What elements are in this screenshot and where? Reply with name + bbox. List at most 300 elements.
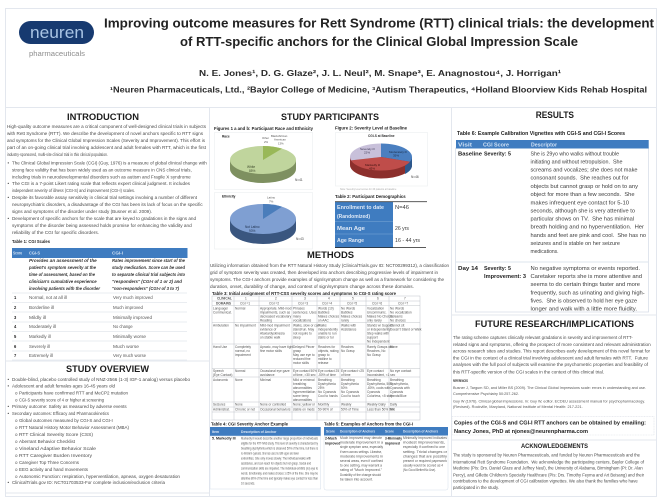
text block: study overview list: •	[8, 377, 10, 382]
table 5: examples of anchors from the CGI-I: moderate improvement in a	[340, 440, 383, 444]
table 3: initial assignment of RTT-CSS scores: Babbles	[318, 310, 330, 314]
table 3: initial assignment of RTT-CSS scores: No Words	[341, 306, 356, 310]
table 3: initial assignment of RTT-CSS scores: rarely	[341, 318, 349, 322]
table 3: initial assignment of RTT-CSS scores: Reaches	[341, 345, 354, 349]
references: Comprehensive Psychiatry 50:257-262.	[453, 392, 519, 396]
logo: neuren pharmaceuticals: neuren	[30, 23, 84, 42]
table 3: initial assignment of RTT-CSS scores: Language/	[213, 306, 228, 310]
table 3: initial assignment of RTT-CSS scores: Vocalization	[367, 306, 384, 310]
table 3: initial assignment of RTT-CSS scores: sleep	[293, 336, 301, 340]
table 3: initial assignment of RTT-CSS scores: No Words	[390, 306, 405, 310]
chart: race pie: N=41	[295, 178, 303, 182]
table 1: CGI scales: to separate clinical trial subjects into	[112, 272, 185, 277]
text block: study overview list: Secondary outcomes: Efficacy and Pharmacokinetics	[12, 411, 110, 416]
references: Busner J, Targum SD, and Miller BS (2009). The Clinical Global Impressions scale: errors in understanding and use.	[453, 386, 646, 390]
table 3: initial assignment of RTT-CSS scores: Weekly-Daily	[367, 402, 386, 406]
table 3: initial assignment of RTT-CSS scores: Delayed Pincer	[293, 345, 316, 349]
table 1: CGI scales: Mildly ill	[29, 315, 46, 320]
text block: acknowledgements: participated in the study.	[453, 485, 499, 490]
text block: introduction paragraph: industry-sponsored, multi-site clinical trial in this clinical population.	[7, 152, 108, 157]
heading: acknowledgements: ACKNOWLEDGEMENTS	[521, 444, 588, 450]
figure 2: severity level at baseline pie	[335, 126, 428, 191]
table 5: examples of anchors from the CGI-I: changes that are possibly	[403, 454, 447, 458]
references: (Revised). Rockville, Maryland, National Institute of Mental Health: 217-221.	[453, 405, 583, 409]
table 3: initial assignment of RTT-CSS scores: Chronic or not	[235, 408, 255, 412]
table 3: initial assignment of RTT-CSS scores: -80%, cools with	[367, 386, 390, 390]
table 3: initial assignment of RTT-CSS scores: No vocalization	[390, 310, 412, 314]
table 1: CGI scales: Very much worse	[113, 353, 147, 358]
table 3: initial assignment of RTT-CSS scores: not require to	[293, 332, 312, 336]
table 3: initial assignment of RTT-CSS scores: Breathing	[367, 378, 381, 382]
vignette: baseline descriptor: objects but cannot grasp or hold on to any	[530, 184, 638, 190]
table 3: initial assignment of RTT-CSS scores: Communicat.	[213, 310, 232, 314]
figure 2: severity level at baseline pie: 43%	[369, 166, 375, 170]
table 3: initial assignment of RTT-CSS scores: Autonomic	[213, 378, 228, 382]
table 3: initial assignment of RTT-CSS scores: CGI =2	[269, 301, 279, 305]
text block: introduction bullets: •	[8, 160, 10, 166]
table 6: example calibration vignettes: Descriptor	[531, 142, 558, 148]
text block: introduction paragraph: part of an on-going clinical trial involving adolescent and adult females with RTT, which is the first	[7, 145, 207, 150]
table 3: initial assignment of RTT-CSS scores: Assistance	[341, 328, 357, 332]
table 4: CGI severity anchor example: attentive 80% of the time and typically makes eye contact for less than	[241, 476, 318, 480]
table 3: initial assignment of RTT-CSS scores: Eye contact <25	[341, 369, 364, 373]
title	[104, 16, 655, 49]
table 3: initial assignment of RTT-CSS scores: Dysrhythmia	[318, 382, 336, 386]
text block: introduction bullets: The CGI is a 7-point Likert rating scale that reflects expert clinical judgment. It includes	[12, 181, 191, 186]
table 1: CGI scales: 5	[14, 334, 17, 339]
text block: introduction bullets	[8, 160, 207, 235]
vignette: day 14 descriptor: fives. She is observed to hold her eye gaze	[530, 299, 638, 305]
table 4: CGI severity anchor example: 5. Markedly Ill	[212, 436, 236, 440]
figure 2: severity level at baseline pie: Moderately ill	[389, 150, 407, 154]
text block: study overview list: Aberrant Behavior Checklist	[19, 439, 76, 444]
table 5: examples of anchors from the CGI-I: usually would be scored as 4	[403, 464, 443, 468]
chart: race pie: Other	[262, 136, 269, 140]
table 3: initial assignment of RTT-CSS scores: Walks with	[341, 324, 356, 328]
vignette: day 14 descriptor: frequently, such as urinating and giving high-	[530, 290, 645, 296]
table 3: initial assignment of RTT-CSS scores: Phrases	[293, 306, 305, 310]
table 5: examples of anchors from the CGI-I: modest improvements,	[403, 440, 445, 444]
table 3: initial assignment of RTT-CSS scores: 25%	[318, 386, 325, 390]
table 3: initial assignment of RTT-CSS scores: reduced fine	[293, 357, 311, 361]
table 3: initial assignment of RTT-CSS scores: No Cyanosis	[341, 390, 359, 394]
table 5: examples of anchors from the CGI-I: present or required paperwork	[403, 459, 447, 463]
text block: study overview list: Caregiver Top Three Concerns	[19, 460, 80, 465]
table 3: initial assignment of RTT-CSS scores: Words (10)	[318, 306, 334, 310]
table 3: initial assignment of RTT-CSS scores: Colorless, <5 stay	[367, 394, 393, 398]
table 3: initial assignment of RTT-CSS scores: sentences. Uses	[293, 310, 317, 314]
table 3: initial assignment of RTT-CSS scores: Daily	[390, 402, 397, 406]
table 3: initial assignment of RTT-CSS scores: Reaches, No	[367, 349, 386, 353]
figure 2: severity level at baseline pie: N=46	[411, 175, 419, 179]
table 3: initial assignment of RTT-CSS scores: None; yellow or	[293, 402, 316, 406]
chart: ethnicity pie: 7%	[269, 200, 274, 204]
text block: introduction bullets: neuropsychiatric disorders, a disadvantage of the CGI has been its lack of focus on the specific	[12, 202, 203, 207]
figure 1: participant race and ethnicity pies	[214, 126, 314, 249]
table 3: initial assignment of RTT-CSS scores: fine motor skills	[260, 349, 282, 353]
table 3: initial assignment of RTT-CSS scores: motor skills	[293, 361, 309, 365]
table 1: CGI scales: Moderately ill	[29, 324, 56, 329]
table 5: examples of anchors from the CGI-I: Description of Anchors	[340, 430, 375, 434]
table 5: examples of anchors from the CGI-I: Much improved may denote	[340, 436, 382, 440]
table 3: initial assignment of RTT-CSS scores: Mild or minimal	[293, 378, 315, 382]
vignette: baseline descriptor: breath holding and no hyperventilation. Her	[530, 225, 644, 231]
text block: introduction bullets: •	[8, 195, 10, 200]
table 2: participant demographics: 26 yrs	[395, 226, 409, 232]
chart: ethnicity pie: N=43	[296, 237, 304, 241]
table 3: initial assignment of RTT-CSS scores: No impairment	[235, 324, 256, 328]
table 3: initial assignment of RTT-CSS scores	[212, 291, 422, 420]
table 1: CGI scales: Minimally improved	[113, 315, 153, 320]
text block: study overview list: o	[15, 446, 18, 451]
chart: race pie: Race	[222, 134, 230, 138]
text block: implications: analyses with the full pool of subjects will examine the psychometric properties and feasibility of	[453, 362, 649, 367]
table 5: examples of anchors from the CGI-I: be taken into account.	[340, 478, 373, 482]
table 3: initial assignment of RTT-CSS scores: some temp	[293, 394, 309, 398]
figure 2: severity level at baseline pie: Markedly ill	[365, 163, 380, 167]
text block: introduction bullets: including trials in neurodevelopmental disorders such as autism and Fragile X syndrome	[12, 174, 191, 180]
chart: race pie: 2%	[264, 140, 269, 144]
table 3: initial assignment of RTT-CSS scores: avoidance	[260, 373, 275, 377]
table 3: initial assignment of RTT-CSS scores: objects, raking	[318, 349, 339, 353]
table 3: initial assignment of RTT-CSS scores: Apraxic, may have tight	[260, 345, 293, 349]
table 4: CGI severity anchor example: eligible for the RTT-NNS study. This level of severity is characterized by	[241, 442, 318, 446]
chart: race pie: White	[247, 165, 255, 169]
table 3: initial assignment of RTT-CSS scores: Weekly	[341, 402, 352, 406]
logo: neuren pharmaceuticals	[19, 21, 94, 58]
text block: introduction bullets: strong face validity that has been widely used as an outcome measure in CNS clinical trials,	[12, 168, 192, 172]
text block: study overview list: o	[15, 398, 18, 402]
table 3: initial assignment of RTT-CSS scores: 50-90% of	[318, 408, 333, 412]
table 3: initial assignment of RTT-CSS scores: -50% of time	[318, 373, 336, 377]
table 2: participant demographics	[335, 194, 427, 248]
table 3: initial assignment of RTT-CSS scores: stable on meds	[293, 408, 315, 412]
text block: introduction bullets: The Clinical Global Impression Scale (CGI) (Guy, 1976) is a measure of global clinical change with	[12, 160, 207, 166]
table 4: CGI severity anchor example: breathing dysrhythmia which is observed 50% of the time, but there is	[241, 446, 318, 450]
table 1: CGI scales: Extremely ill	[29, 353, 53, 358]
table 2: participant demographics: Enrollment to date	[337, 205, 384, 211]
text block: study overview list: RTT Clinical Severity Score (CSS)	[19, 432, 94, 437]
heading: results: RESULTS	[536, 110, 574, 120]
text block: methods paragraph: duration, onset, durability of change, and context of sign/symptom change across these domains.	[210, 284, 414, 289]
table 5: examples of anchors from the CGI-I: single symptom area, especially	[340, 445, 383, 449]
table 5: examples of anchors from the CGI-I: moderate improvements in	[340, 454, 383, 458]
table 2: participant demographics: N=46	[395, 205, 409, 211]
table 3: initial assignment of RTT-CSS scores: DOMAINS	[216, 301, 231, 305]
table 1 caption: Table 1: CGI Scales	[12, 239, 51, 244]
text block: methods paragraph	[210, 263, 449, 289]
table 3: initial assignment of RTT-CSS scores: No Cyanosis	[318, 390, 336, 394]
table 1: CGI scales: 7	[14, 353, 17, 358]
vignette: baseline descriptor: screams and vocalizes; she does not make	[530, 168, 638, 174]
table 1: CGI scales: time of assessment, based on the	[29, 272, 96, 277]
table 3: initial assignment of RTT-CSS scores: of time	[341, 373, 351, 377]
table 3: initial assignment of RTT-CSS scores: Cyanosis	[367, 390, 381, 394]
vignette: baseline descriptor: hands and feet are pink and cool. She has no	[530, 233, 647, 239]
table 3: initial assignment of RTT-CSS scores: 50% of Time	[341, 408, 359, 412]
table 3: initial assignment of RTT-CSS scores: No Grasp	[341, 349, 355, 353]
table 3: initial assignment of RTT-CSS scores: Occasional eye gaze	[260, 369, 290, 373]
text block: introduction bullets: •	[8, 181, 10, 186]
chart: ethnicity pie: Not Latino	[245, 225, 260, 229]
table 1: CGI scales: patient's symptom severity at the	[28, 265, 97, 270]
table 4: CGI severity anchor example: assistance, and can reach for objects but not grasp. Social and	[241, 462, 311, 466]
table 3: initial assignment of RTT-CSS scores: support	[367, 336, 378, 340]
table 3: initial assignment of RTT-CSS scores: CGI =3	[298, 301, 308, 305]
table 3: initial assignment of RTT-CSS scores: Completely	[235, 345, 251, 349]
figure 2: severity level at baseline pie: Note: Severity level scores for 46 patients at baseline	[340, 188, 397, 191]
table 3: initial assignment of RTT-CSS scores: midline to	[318, 357, 332, 361]
text block: study overview list: o	[15, 467, 18, 472]
table 4: CGI severity anchor example: no limb/arm cyanosis. She has used, but still upper and lower	[241, 452, 299, 456]
table 3: initial assignment of RTT-CSS scores: impairment	[235, 353, 251, 357]
table 3: initial assignment of RTT-CSS scores: CGI =4	[322, 301, 332, 305]
text block: implications	[453, 335, 651, 375]
table 5: examples of anchors from the CGI-I: Improved	[325, 442, 340, 446]
table 3: initial assignment of RTT-CSS scores: stairs or tur	[318, 336, 335, 340]
text block: study overview list: ClinicalTrials.gov ID: NCT01703533-For complete inclusion/exclusion criteria	[12, 480, 165, 485]
table 3: initial assignment of RTT-CSS scores: No eye contact	[390, 369, 411, 373]
chart: race pie: Black/African	[271, 134, 288, 138]
text block: methods paragraph: symptoms. The CGI-I anchors provide examples of sign/symptom change as well as a framework for considering the	[210, 277, 445, 282]
panel: introduction	[7, 112, 207, 235]
table 6: example calibration vignettes: Severity: 5	[484, 266, 511, 272]
table 6: example calibration vignettes: CGI Score	[483, 142, 510, 148]
text block: implications: related signs and symptoms, offering the prospect of more consistent and relevant administration	[453, 342, 651, 347]
table 1: CGI scales: Much improved	[113, 305, 144, 310]
table 3: initial assignment of RTT-CSS scores: Stands w/ Support	[367, 324, 393, 328]
table 3: initial assignment of RTT-CSS scores: of time, >30 sec	[293, 373, 316, 377]
figure 1 caption: Figures 1 a and b: Participant Race and Ethnicity	[214, 126, 314, 131]
text block: study overview list: Double-blind, placebo controlled study of NNZ-2566 (1-3) IGF-1 analog) versus placebo	[12, 377, 191, 382]
table 3: initial assignment of RTT-CSS scores: grasp	[293, 349, 301, 353]
table 3: initial assignment of RTT-CSS scores: 50%	[341, 386, 348, 390]
text block: study overview list: Adolescent and adult females ages 16-45 years old	[12, 384, 115, 388]
table 5: examples of anchors from the CGI-I: 2-Much	[325, 436, 337, 440]
table 4: CGI severity anchor example: words. Emotionally, and makes choices 1-25% of the time. She may be	[241, 472, 318, 476]
table 4: CGI severity anchor example	[210, 422, 321, 489]
table 3: initial assignment of RTT-CSS scores: Dysrhythmia, 50%	[367, 382, 393, 386]
table 3: initial assignment of RTT-CSS scores: grasp to	[318, 353, 330, 357]
text block: implications: this RTT-specific version of the CGI scales in the context of this clinical trial.	[453, 370, 604, 375]
figure 2 caption: Figure 2: Severity Level at Baseline	[335, 126, 408, 130]
table 3: initial assignment of RTT-CSS scores: No choices	[390, 318, 406, 322]
table 3: initial assignment of RTT-CSS scores: Dysrhythmia	[341, 382, 359, 386]
vignette: baseline descriptor: medications.	[530, 249, 559, 255]
chart: race pie: 85%	[249, 169, 256, 173]
text block: study overview list: CGI-S severity score of 4 or higher at screening	[19, 398, 104, 402]
table 3: initial assignment of RTT-CSS scores: hyperventilation	[293, 390, 316, 394]
table 2 caption: Table 2: Participant Demographics	[335, 194, 406, 199]
text block: implications: the CGI in the context of a clinical trial involving adolescent and adult females with RTT. Future	[453, 356, 649, 361]
table 1: CGI scales: study medication. Score can be used	[112, 265, 185, 270]
callout: copies of anchors	[452, 417, 654, 435]
table 1: CGI scales: CGI-I	[112, 250, 123, 256]
table 3: initial assignment of RTT-CSS scores: abnormalities	[293, 398, 312, 402]
vignette: baseline descriptor	[530, 151, 647, 255]
text block: study overview list: o	[15, 418, 18, 423]
table 6: example calibration vignettes: Baseline	[458, 151, 482, 157]
table 3: initial assignment of RTT-CSS scores: 3	[304, 297, 306, 301]
table 5: examples of anchors from the CGI-I: if seen across settings. Likewise,	[340, 450, 382, 454]
table 1: CGI scales: "non-responders" (CGI-I of 3 to 7)	[112, 286, 180, 291]
text block: introduction bullets: •	[8, 216, 10, 221]
table 3: initial assignment of RTT-CSS scores: 1	[245, 297, 247, 301]
heading: study participants: STUDY PARTICIPANTS	[281, 112, 379, 122]
table 4: CGI severity anchor example: 10 seconds.	[241, 482, 255, 486]
text block: study overview list: Vineland Adaptive Behavior Scale	[19, 446, 97, 451]
table 4: CGI severity anchor example: Description of Anchor	[241, 430, 277, 434]
table 3: initial assignment of RTT-CSS scores: CGI =1	[240, 301, 250, 305]
table 2: participant demographics: Mean Age	[337, 226, 365, 232]
logo: neuren pharmaceuticals: pharmaceuticals	[29, 51, 86, 58]
table 3: initial assignment of RTT-CSS scores: No Grasp	[367, 353, 381, 357]
table 5: examples of anchors from the CGI-I: to one setting, may warrant a	[340, 464, 382, 468]
table 3: initial assignment of RTT-CSS scores: Seizures	[213, 402, 226, 406]
text block: study overview list: o	[15, 460, 18, 465]
table 3: initial assignment of RTT-CSS scores: Makes choices	[318, 314, 339, 318]
callout: copies of anchors: Copies of the CGI-S and CGI-I RTT anchors can be obtained by emailing:	[454, 420, 646, 426]
table 1: CGI scales: Score	[13, 250, 23, 256]
table 3: initial assignment of RTT-CSS scores: NR	[390, 408, 395, 412]
table 1: CGI scales: involving patients with the disorder	[29, 286, 100, 291]
affiliations: ¹Neuren Pharmaceuticals, Ltd., ²Baylor College of Medicine, ³Autism Therapeutics, ⁴Holland Bloorview Kids Rehab Hospital	[110, 86, 647, 94]
table 3: initial assignment of RTT-CSS scores: Appropriate. Mild-mod	[260, 306, 292, 310]
table 3: initial assignment of RTT-CSS scores: decreased vocabulary	[260, 314, 292, 318]
text block: study overview list: Participants have confirmed RTT and MeCP2 mutation	[19, 390, 128, 396]
table 3: initial assignment of RTT-CSS scores: impairments, such as	[260, 310, 291, 314]
table 3: initial assignment of RTT-CSS scores: Step walks with	[367, 332, 389, 336]
vignette: baseline descriptor: initiating and without retropulsion. She	[530, 159, 623, 165]
text block: implications: The rating scheme captures clinically relevant gradations in severity and improvement of RTT-	[453, 335, 633, 340]
text block: introduction bullets: reliability of the CGI for specific disorders.	[12, 230, 99, 235]
table 3: initial assignment of RTT-CSS scores: Administrat.	[213, 408, 230, 412]
table 5: examples of anchors from the CGI-I: Durability of the change should	[340, 473, 381, 477]
table 3: initial assignment of RTT-CSS scores: Dysrhythmia,	[390, 382, 409, 386]
table 1: CGI scales: 4	[14, 324, 17, 329]
table 3: initial assignment of RTT-CSS scores: Eye contact 50%	[293, 369, 317, 373]
table 3: initial assignment of RTT-CSS scores: Makes choices	[341, 314, 362, 318]
callout: copies of anchors: Nancy Jones, PhD at njones@neurenpharma.com	[454, 429, 588, 435]
table 3: initial assignment of RTT-CSS scores: Minimal	[260, 378, 271, 382]
table 3: initial assignment of RTT-CSS scores: Breathing	[318, 378, 332, 382]
text block: study overview list: Primary outcome: Safety as measured by adverse events	[12, 404, 127, 409]
table 1: CGI scales: "responders" (CGI-I of 1 or 2) and	[112, 279, 182, 284]
table 1: CGI scales: Borderline ill	[29, 305, 54, 310]
table 3: initial assignment of RTT-CSS scores: Eye contact 25	[318, 369, 339, 373]
text block: introduction paragraph: High-quality outcome measures are a critical component of well-designed clinical trials in subjects	[7, 124, 207, 129]
table 3: initial assignment of RTT-CSS scores: Hands/Blue	[390, 394, 407, 398]
table 2: participant demographics: 16 - 44 yrs	[395, 238, 420, 244]
vignette: day 14 descriptor: No negative symptoms or events reported.	[530, 266, 640, 272]
vignette: baseline descriptor: seconds, although she is very attentive to	[530, 209, 636, 215]
table 3: initial assignment of RTT-CSS scores: Breathing	[341, 378, 355, 382]
text block: study overview list: o	[15, 425, 18, 430]
text block: introduction paragraph: and symptoms for the Clinical Global Impression Scales (Severity and Improvement). This effort is	[7, 138, 206, 143]
text block: acknowledgements: The study is sponsored by Neuren Pharmaceuticals, and funded by Neuren Pharmaceuticals and the	[453, 452, 640, 457]
table 3: initial assignment of RTT-CSS scores: abnormalities	[293, 386, 312, 390]
table 1: CGI scales: Rates improvement since start of the	[112, 258, 186, 263]
vignette: baseline descriptor: seizures and is stable on her seizure	[530, 241, 621, 247]
table 1: CGI scales: Normal, not at all ill	[29, 295, 67, 300]
table 2: participant demographics: Age Range	[337, 238, 364, 244]
text block: study overview list: o	[15, 439, 18, 444]
table 1: CGI scales: 6	[14, 344, 17, 349]
table 3: initial assignment of RTT-CSS scores: Normal	[235, 306, 246, 310]
table 3: initial assignment of RTT-CSS scores: breathing	[293, 382, 307, 386]
table 3: initial assignment of RTT-CSS scores: None	[390, 345, 398, 349]
table 3: initial assignment of RTT-CSS scores: Ambulation	[213, 324, 229, 328]
table 3: initial assignment of RTT-CSS scores: or independently	[367, 328, 391, 332]
table 3: initial assignment of RTT-CSS scores: Ataxia/dyskinesia	[260, 332, 285, 336]
table 1: CGI scales: No change	[113, 324, 133, 329]
vignette: baseline descriptor: object for more than a few seconds. She	[530, 192, 635, 198]
table 1: CGI scales: 3	[14, 315, 17, 320]
title: Improving outcome measures for Rett Syndrome (RTT) clinical trials: the development	[104, 16, 655, 30]
text block: introduction bullets: Development of specific anchors for the scale that are keyed to gradations in the signs and	[12, 216, 197, 221]
table 5: examples of anchors from the CGI-I: especially if confined to one	[403, 445, 445, 449]
table 3: initial assignment of RTT-CSS scores: Cannot sit	[390, 324, 404, 328]
references: Guy W (1976). Clinical global impressions. In: Guy W, editor. ECDEU assessment manual for psychopharmacology.	[453, 400, 645, 404]
text block: study overview list: •	[8, 480, 10, 485]
table 3: initial assignment of RTT-CSS scores: 2	[275, 297, 277, 301]
chart: race pie: 13%	[278, 142, 284, 146]
panel: future research / implications	[453, 319, 651, 409]
table 3: initial assignment of RTT-CSS scores: independently	[318, 328, 338, 332]
table 1: CGI scales	[12, 239, 188, 360]
table 3: initial assignment of RTT-CSS scores: Monthly	[318, 402, 330, 406]
vignette: day 14 descriptor	[530, 266, 645, 313]
table 3: initial assignment of RTT-CSS scores: (Eye Contact)	[213, 373, 232, 377]
table 3: initial assignment of RTT-CSS scores: Uncommunic.	[367, 310, 387, 314]
table 3: initial assignment of RTT-CSS scores: Reaches for	[318, 345, 336, 349]
table 6: example calibration vignettes: Severity: 5	[484, 151, 511, 157]
text block: study overview list: •	[8, 404, 10, 409]
table 3: initial assignment of RTT-CSS scores: Breathing	[390, 378, 404, 382]
table 5: examples of anchors from the CGI-I: setting. Trivial changes or	[403, 450, 448, 454]
table 1: CGI scales: Much worse	[113, 344, 140, 349]
vignette: day 14 descriptor: Caretaker reports she is more attentive and	[530, 274, 642, 280]
figure 2: severity level at baseline pie: 35%	[393, 154, 399, 158]
title: of RTT-specific anchors for the Clinical Global Impression Scale	[180, 34, 578, 49]
table 1: CGI scales: Very much improved	[113, 295, 153, 300]
table 3: initial assignment of RTT-CSS scores: Walks, slow or can	[293, 324, 320, 328]
table 3: initial assignment of RTT-CSS scores: Occasional behaviors	[260, 408, 291, 412]
table 1: CGI scales: clinician's cumulative experience	[29, 279, 97, 284]
table 3: initial assignment of RTT-CSS scores: normal, no	[235, 349, 250, 353]
text block: acknowledgements: Percy), and Gillette Children's Specialty Healthcare (PIs: Drs. Timothy Feyma and Art Beisang) and their	[453, 472, 644, 477]
text block: introduction bullets: signs and symptoms of the disorder under study (Busner et al. 2009).	[12, 209, 152, 214]
vignette: day 14 descriptor: seems to do certain things faster and more	[530, 282, 641, 288]
text block: study overview list: RTT Caregiver Burden Inventory	[19, 453, 93, 458]
text block: study overview list: EEG activity and hand movements	[19, 467, 89, 472]
table 6: example calibration vignettes: Improvement: 3	[484, 274, 526, 280]
table 3: initial assignment of RTT-CSS scores: CGI =6	[372, 301, 382, 305]
table 3: initial assignment of RTT-CSS scores: evidence of	[260, 328, 276, 332]
text block: study overview list: o	[15, 453, 18, 458]
table 3: initial assignment of RTT-CSS scores: Babbles	[341, 310, 353, 314]
table 4: CGI severity anchor example: extremities. She only moves slowly. The individual walks with	[241, 456, 311, 460]
vignette: baseline descriptor: She is 29yo who walks without trouble	[530, 151, 620, 157]
text block: acknowledgements: Medicine (PIs: Drs. Daniel Glaze and Jeffrey Neul), the University of Alabama, Birmingham (PI: Dr. Alan	[453, 466, 643, 471]
table 1: CGI scales: Minimally worse	[113, 334, 147, 339]
figure 2: severity level at baseline pie: Severely ill	[360, 147, 375, 151]
text block: introduction paragraph	[7, 124, 207, 157]
table 3: initial assignment of RTT-CSS scores: No independent	[367, 340, 390, 344]
panel: acknowledgements	[453, 444, 645, 490]
table 3: initial assignment of RTT-CSS scores: only rarely	[367, 318, 382, 322]
chart: ethnicity pie	[214, 192, 312, 249]
